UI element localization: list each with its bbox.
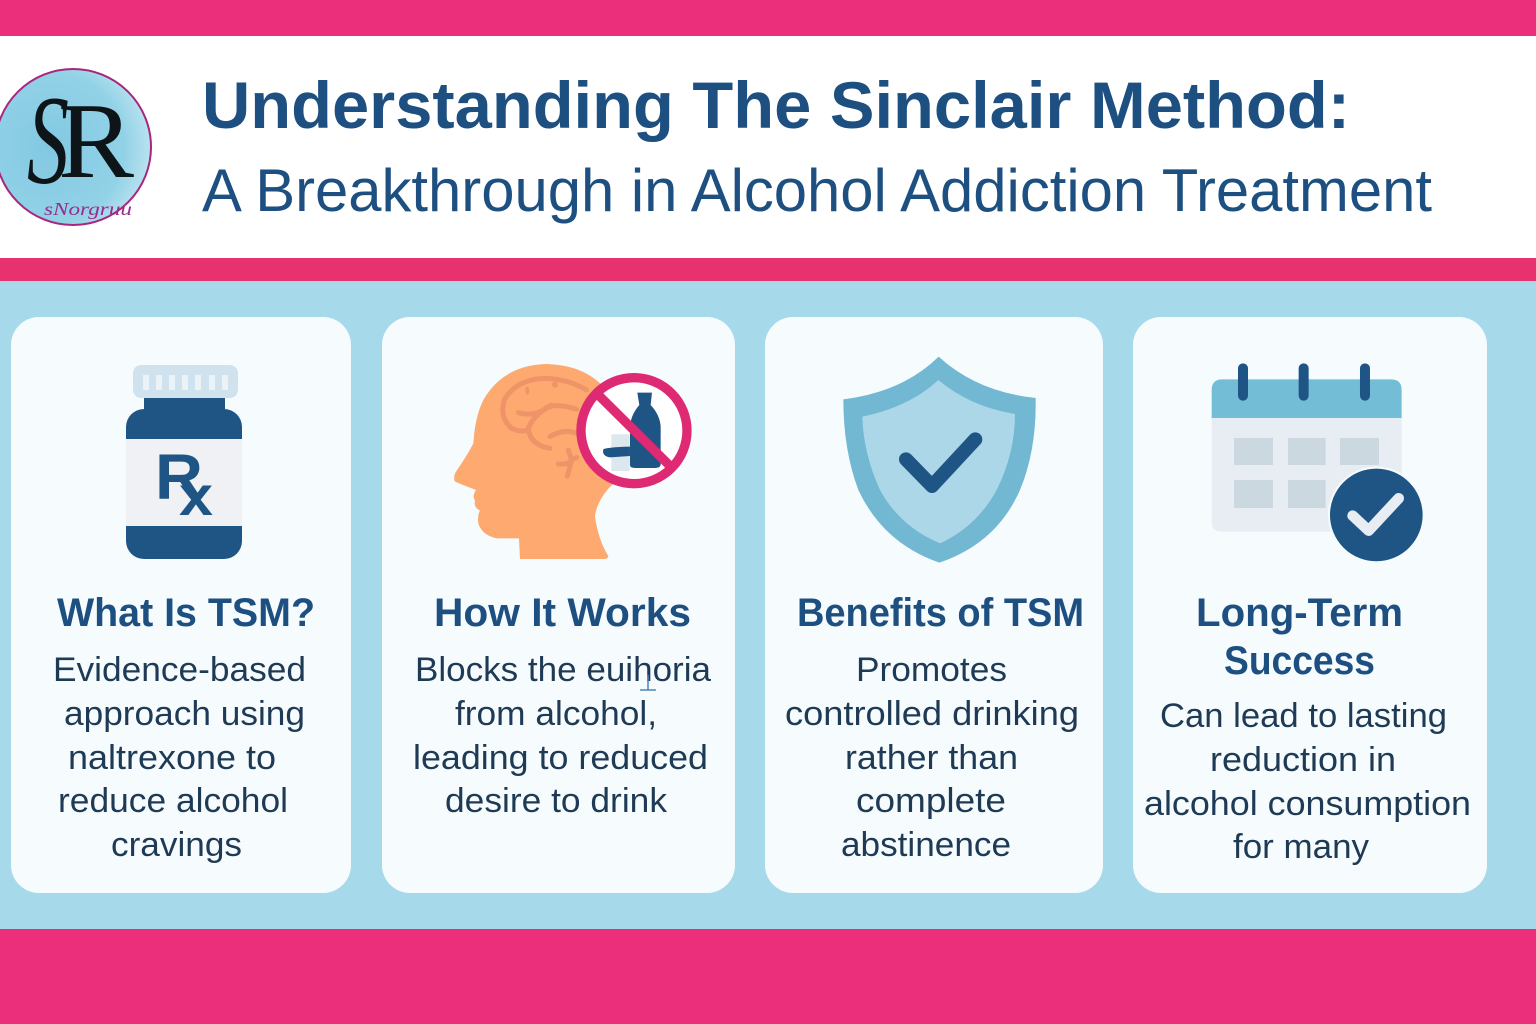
text: Benefits description: complete	[856, 782, 1006, 820]
logo: SR monogram: sNorgruu	[44, 199, 132, 219]
logo: SR monogram: R	[58, 82, 134, 201]
bottom pink band	[0, 929, 1536, 1024]
icon: calendar with check	[1212, 363, 1424, 562]
header lower pink stripe	[0, 258, 1536, 281]
heading: Long-Term Success: Success	[1224, 639, 1375, 683]
text: What Is TSM description	[53, 651, 306, 864]
top pink band	[0, 0, 1536, 36]
text: What Is TSM description: Evidence-based	[53, 651, 306, 689]
panel: What Is TSM?	[11, 317, 351, 893]
text: How It Works description	[413, 651, 711, 820]
panel: How It Works	[382, 317, 735, 893]
text: Benefits description	[785, 651, 1079, 864]
panel: Benefits of TSM	[765, 317, 1103, 893]
icon: head with crossed-out bottle	[454, 364, 687, 559]
text: Benefits description: rather than	[845, 739, 1018, 777]
text: How It Works description: desire to drink	[445, 782, 668, 820]
heading: What Is TSM?: What Is TSM?	[57, 591, 315, 635]
icon: shield with check	[843, 357, 1036, 563]
text: Long-Term description: Can lead to lasting	[1160, 697, 1447, 735]
text: What Is TSM description: naltrexone to	[68, 739, 276, 777]
logo: SR monogram: S	[27, 71, 69, 211]
text: What Is TSM description: cravings	[111, 826, 242, 864]
text: How It Works description: leading to reduced	[413, 739, 708, 777]
text: Long-Term description: alcohol consumption	[1144, 785, 1471, 823]
text: How It Works description: from alcohol,	[455, 695, 657, 733]
light blue content background	[0, 281, 1536, 929]
title: Understanding The Sinclair Method:	[202, 68, 1350, 142]
icon: prescription bottle	[126, 365, 242, 559]
text: How It Works description: Blocks the euihoria	[415, 651, 711, 689]
icon: prescription bottle: x	[179, 464, 213, 527]
logo: SR monogram	[0, 69, 151, 225]
heading: Long-Term Success: Long-Term	[1196, 591, 1403, 635]
text: Benefits description: Promotes	[856, 651, 1007, 689]
subtitle: A Breakthrough in Alcohol Addiction Treatment	[202, 157, 1432, 224]
text: Benefits description: abstinence	[841, 826, 1011, 864]
text: What Is TSM description: reduce alcohol	[58, 782, 288, 820]
heading: Long-Term Success	[1196, 591, 1403, 683]
text: Long-Term description: reduction in	[1210, 741, 1396, 779]
panel: Long-Term Success	[1133, 317, 1487, 893]
heading: How It Works: How It Works	[434, 591, 691, 635]
header band	[0, 36, 1536, 258]
text: Benefits description: controlled drinking	[785, 695, 1079, 733]
text: Long-Term description	[1144, 697, 1471, 866]
text: What Is TSM description: approach using	[64, 695, 305, 733]
text: Long-Term description: for many	[1233, 828, 1369, 866]
heading: Benefits of TSM: Benefits of TSM	[797, 591, 1084, 635]
icon: prescription bottle: R	[155, 441, 203, 513]
